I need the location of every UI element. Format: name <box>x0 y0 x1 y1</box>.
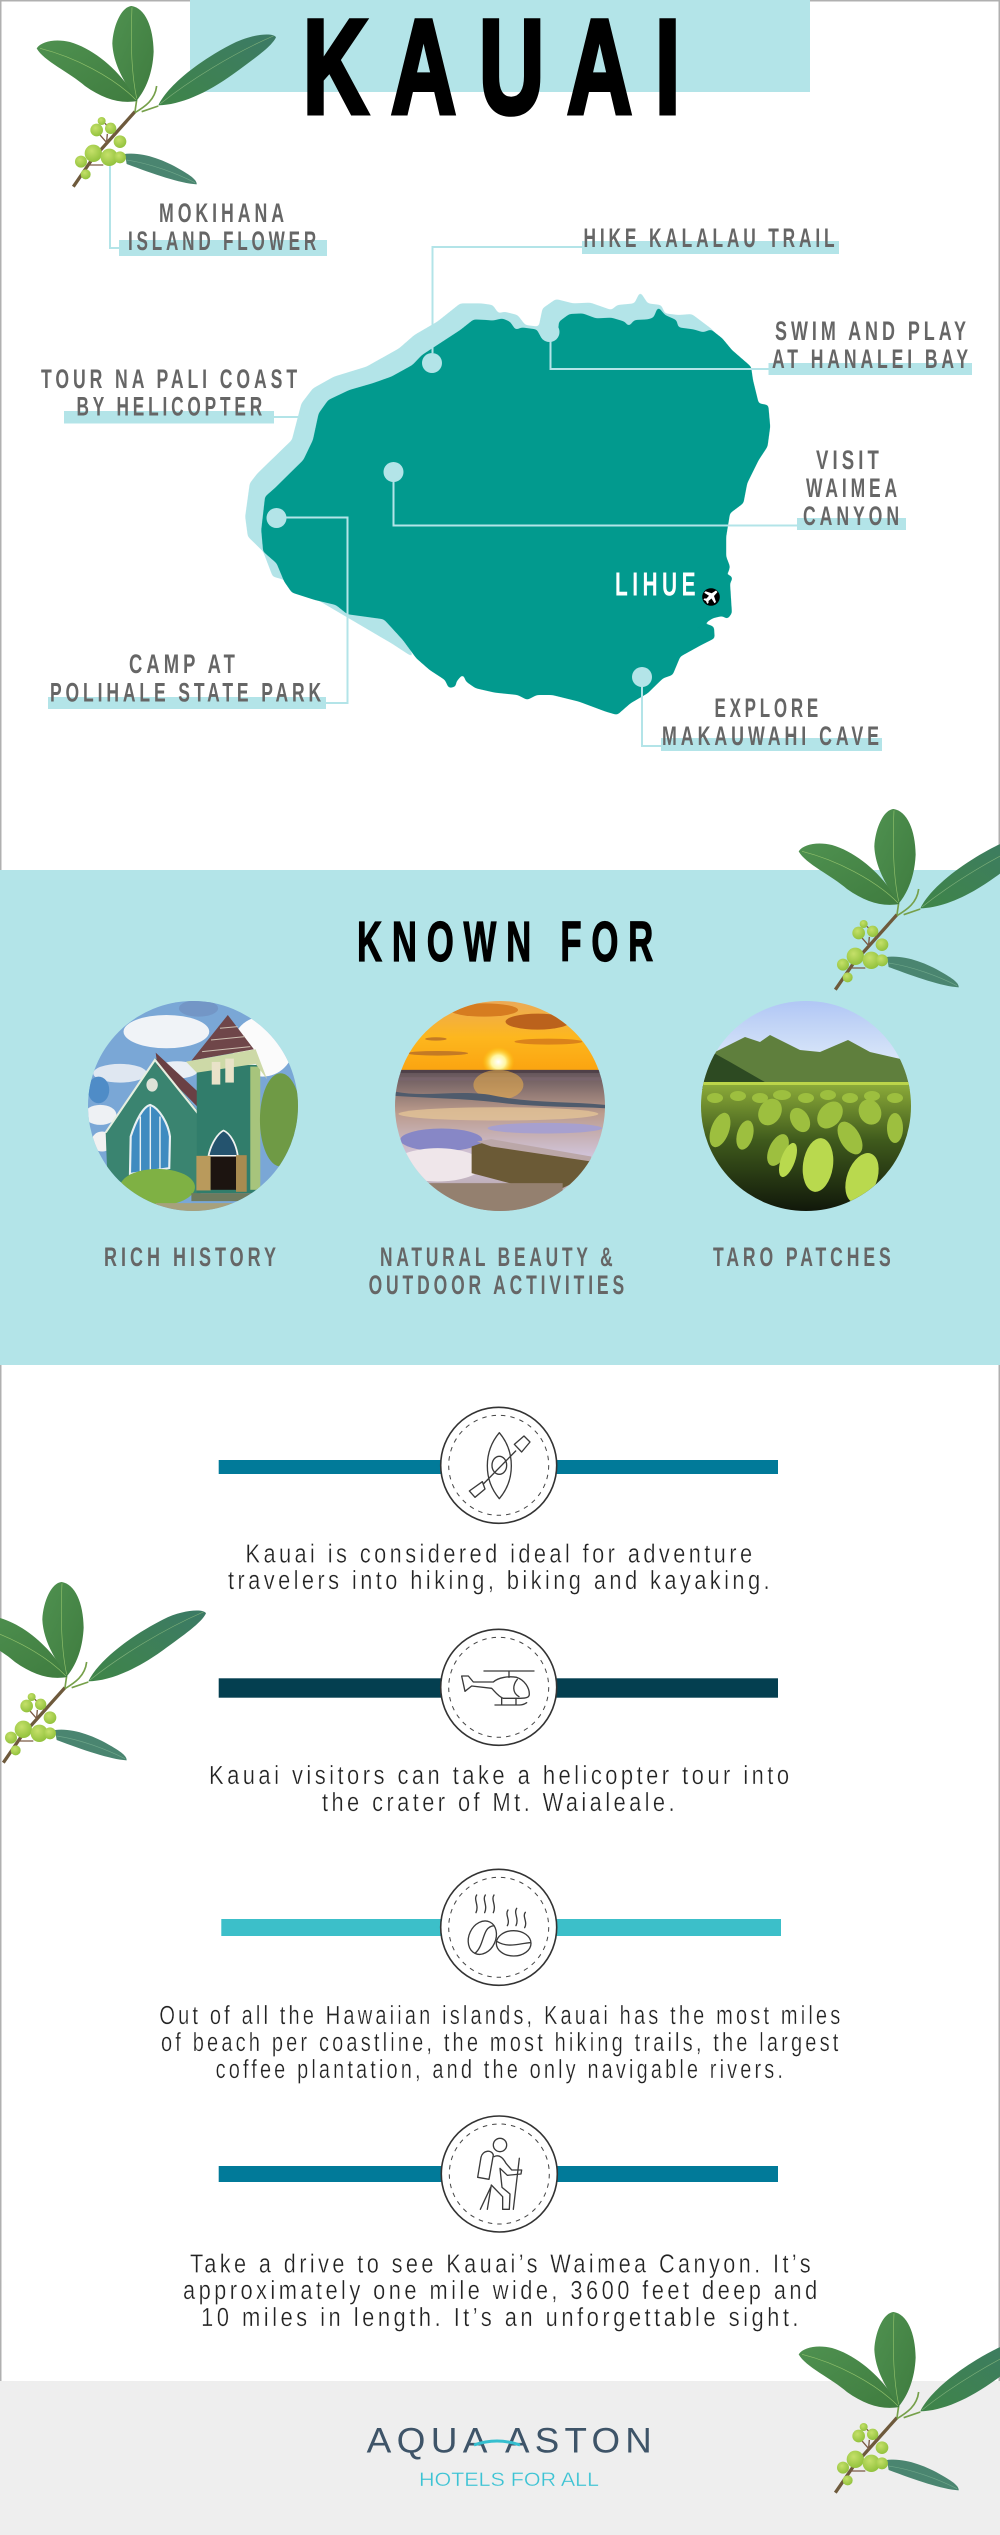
footer <box>0 2381 1000 2535</box>
callout: Tour Na Pali Coast by helicopter: BY HELICOPTER <box>76 392 266 422</box>
callout: Swim and play at Hanalei Bay <box>768 316 972 375</box>
decoration: mokihana sprig, footer <box>799 2312 1000 2493</box>
callout: Tour Na Pali Coast by helicopter: TOUR NA PALI COAST <box>41 364 301 394</box>
fact text: Kauai is considered ideal for adventure <box>246 1541 756 1569</box>
logo: Aqua Aston <box>367 2421 657 2491</box>
label: natural beauty and outdoor activities <box>369 1242 628 1300</box>
bar <box>219 1460 778 1474</box>
footer background <box>0 2381 1000 2535</box>
decoration: mokihana sprig, known for panel <box>799 809 1000 990</box>
logo: Aqua Aston: ASTON <box>505 2421 657 2460</box>
label: natural beauty and outdoor activities: OUTDOOR ACTIVITIES <box>369 1270 628 1300</box>
callout: Hike Kalalau Trail: HIKE KALALAU TRAIL <box>584 223 838 253</box>
fact text: 10 miles in length. It’s an unforgettable sight. <box>201 2304 802 2332</box>
callout: Camp at Polihale State Park: POLIHALE STATE PARK <box>50 678 325 708</box>
icon: coffee beans <box>441 1869 557 1985</box>
fact text <box>183 2250 821 2332</box>
photo: green church <box>84 997 302 1216</box>
callout: Mokihana island flower: MOKIHANA <box>159 198 288 228</box>
island land <box>261 307 770 715</box>
callout: Explore Makauwahi Cave: MAKAUWAHI CAVE <box>662 721 883 751</box>
title block <box>190 0 810 142</box>
fact text: Kauai visitors can take a helicopter tour into <box>209 1762 792 1790</box>
callout: Explore Makauwahi Cave: EXPLORE <box>714 693 822 723</box>
label: natural beauty and outdoor activities: NATURAL BEAUTY & <box>380 1242 616 1272</box>
icon: helicopter <box>441 1629 557 1745</box>
fact: helicopter tour <box>209 1629 792 1817</box>
island coastline shade <box>245 292 751 658</box>
callout: Visit Waimea Canyon: WAIMEA <box>806 473 901 503</box>
fact text <box>159 2002 843 2084</box>
city label: Lihue: LIHUE <box>615 566 700 602</box>
photo: sunset over the sea <box>391 997 609 1213</box>
label: taro patches: TARO PATCHES <box>713 1242 895 1272</box>
fact text: approximately one mile wide, 3600 feet deep and <box>183 2277 821 2305</box>
bar <box>219 2166 778 2182</box>
leader lines <box>110 165 799 746</box>
fact text: coffee plantation, and the only navigable rivers. <box>216 2056 786 2084</box>
panel background <box>0 870 1000 1365</box>
fact text <box>228 1541 773 1595</box>
heading: known for: KNOWN FOR <box>357 910 663 974</box>
icon: hiker <box>441 2116 557 2232</box>
icon: kayak and paddle <box>441 1407 557 1523</box>
callout: Camp at Polihale State Park: CAMP AT <box>129 649 239 679</box>
fact text <box>209 1762 792 1817</box>
fact text: travelers into hiking, biking and kayaking. <box>228 1567 773 1595</box>
callout: Hike Kalalau Trail <box>582 223 839 254</box>
callout: Camp at Polihale State Park <box>48 649 326 709</box>
bar <box>221 1919 781 1936</box>
bar <box>219 1678 778 1698</box>
title band <box>190 0 810 92</box>
logo: Aqua Aston: AQUA <box>367 2421 493 2460</box>
callout: Visit Waimea Canyon <box>797 445 906 531</box>
fact text: Take a drive to see Kauai’s Waimea Canyon. It’s <box>190 2250 814 2278</box>
icon: airport <box>702 588 720 606</box>
panel: known for <box>0 870 1000 1365</box>
fact: adventure travel <box>219 1407 778 1595</box>
callout: Tour Na Pali Coast by helicopter <box>41 364 301 424</box>
callout: Mokihana island flower <box>119 198 327 256</box>
label: rich history: RICH HISTORY <box>104 1242 280 1272</box>
fact text: the crater of Mt. Waialeale. <box>322 1789 678 1817</box>
logo: Aqua Aston: HOTELS FOR ALL <box>419 2469 599 2491</box>
callout: Mokihana island flower: ISLAND FLOWER <box>128 226 320 256</box>
callout: Explore Makauwahi Cave <box>661 693 883 751</box>
fact: Waimea Canyon drive <box>183 2116 821 2332</box>
callout: Visit Waimea Canyon: VISIT <box>816 445 883 475</box>
decoration: mokihana sprig, left margin <box>0 1582 206 1763</box>
map markers <box>266 322 652 687</box>
fact: beaches, trails and coffee <box>159 1869 843 2084</box>
callout: Visit Waimea Canyon: CANYON <box>803 501 903 531</box>
photo: taro patches <box>700 1000 915 1212</box>
decoration: mokihana sprig, top left <box>37 6 276 187</box>
map: Kauai island <box>245 292 770 715</box>
